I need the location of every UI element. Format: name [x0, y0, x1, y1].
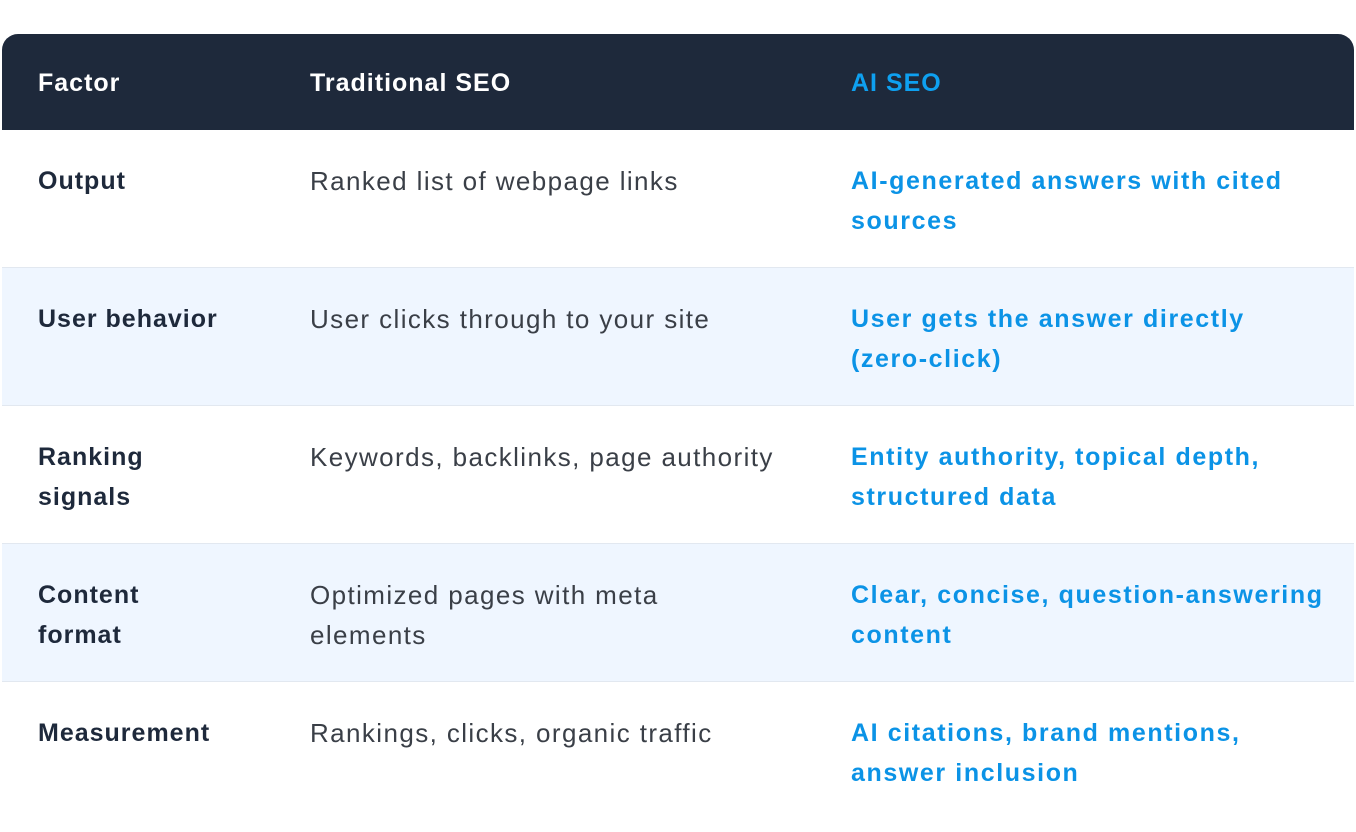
row: ranking signals: Keywords, backlinks, page authority	[310, 442, 774, 472]
row: ranking signals: Ranking	[38, 443, 144, 471]
header row: Factor	[38, 69, 120, 97]
row: user behavior	[2, 268, 1354, 406]
row: content format: content	[851, 621, 952, 649]
row: user behavior: User gets the answer directly	[851, 305, 1245, 333]
row: content format: Clear, concise, question-answering	[851, 581, 1324, 609]
row: ranking signals: signals	[38, 483, 131, 511]
row: user behavior: (zero-click)	[851, 345, 1002, 373]
row: output: Output	[38, 167, 126, 195]
header row: Traditional SEO	[310, 69, 511, 97]
row: output: sources	[851, 207, 958, 235]
row: output: Ranked list of webpage links	[310, 166, 679, 196]
row: measurement: AI citations, brand mentions,	[851, 719, 1240, 747]
row: measurement: Rankings, clicks, organic traffic	[310, 718, 713, 748]
row: content format	[2, 544, 1354, 682]
row: ranking signals	[2, 406, 1354, 544]
row: ranking signals: Entity authority, topical depth,	[851, 443, 1260, 471]
row: output	[2, 130, 1354, 268]
row: ranking signals: structured data	[851, 483, 1057, 511]
row: measurement: Measurement	[38, 719, 210, 747]
row: measurement: answer inclusion	[851, 759, 1079, 787]
header row	[2, 34, 1354, 130]
row: user behavior: User clicks through to your site	[310, 304, 710, 334]
row: content format: format	[38, 621, 122, 649]
row: content format: Content	[38, 581, 139, 609]
row: user behavior: User behavior	[38, 305, 218, 333]
row: content format: Optimized pages with meta	[310, 580, 659, 610]
header row: AI SEO	[851, 69, 942, 97]
row: output: AI-generated answers with cited	[851, 167, 1283, 195]
row: content format: elements	[310, 620, 427, 650]
row: measurement	[38, 718, 1240, 787]
